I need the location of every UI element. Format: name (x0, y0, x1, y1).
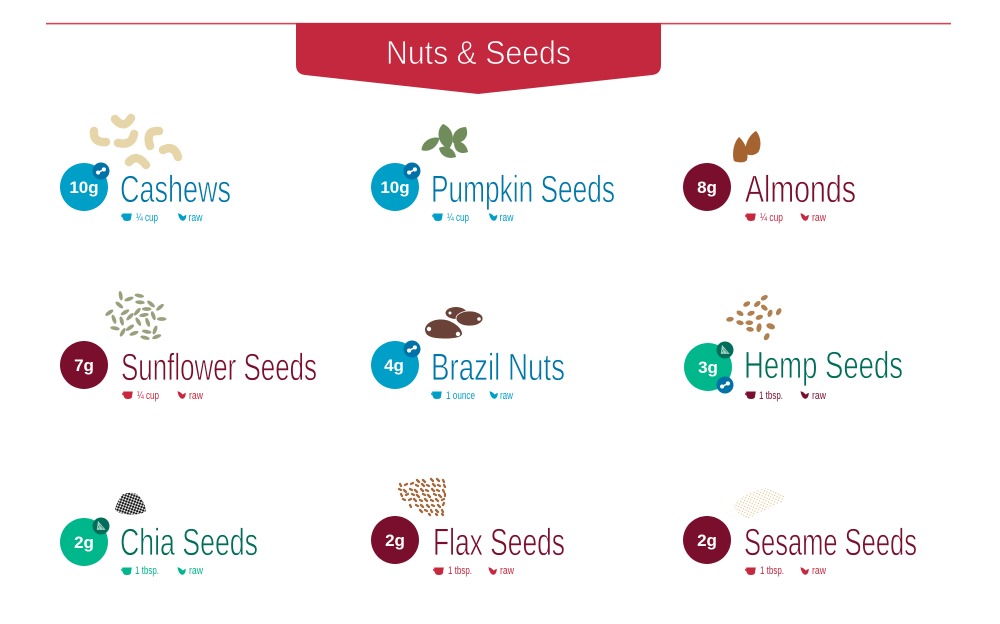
protein circle (371, 341, 419, 389)
icon: protein badge (404, 162, 420, 180)
panel: sesame seeds (683, 488, 917, 577)
name: Cashews (120, 169, 231, 211)
icon: almonds (733, 131, 760, 162)
serving: raw (812, 565, 826, 577)
serving (433, 565, 514, 577)
serving: 1 tbsp. (760, 565, 784, 577)
serving: raw (500, 390, 513, 402)
panel: brazil nuts (371, 307, 565, 402)
panel: cashews (60, 118, 231, 224)
panel: almonds (683, 131, 856, 224)
icon: hemp seeds (726, 294, 783, 341)
icon: fiber badge (92, 518, 110, 534)
serving: raw (812, 212, 826, 224)
amount: 7g (74, 356, 94, 375)
amount: 2g (697, 531, 717, 550)
serving: raw (189, 390, 203, 402)
serving: ¼ cup (137, 390, 159, 402)
protein circle (683, 516, 731, 564)
serving: 1 ounce (446, 390, 475, 402)
serving: 1 tbsp. (448, 565, 472, 577)
serving (431, 390, 513, 402)
serving (121, 565, 203, 577)
serving: 1 tbsp. (135, 565, 159, 577)
icon: sesame seeds (733, 488, 785, 519)
protein circle (683, 163, 731, 211)
name: Hemp Seeds (744, 345, 903, 387)
serving: raw (500, 565, 514, 577)
name: Pumpkin Seeds (431, 169, 615, 211)
serving: raw (500, 212, 514, 224)
protein circle (371, 516, 419, 564)
name: Brazil Nuts (431, 347, 565, 389)
amount: 10g (69, 178, 99, 197)
name: Chia Seeds (120, 522, 258, 564)
name: Sunflower Seeds (121, 347, 317, 389)
serving: raw (189, 565, 203, 577)
icon: flax seeds (399, 479, 445, 515)
amount: 3g (698, 358, 718, 377)
protein circle (60, 341, 108, 389)
serving: ¼ cup (447, 212, 469, 224)
panel: sunflower seeds (60, 291, 317, 402)
title: Nuts & Seeds (386, 34, 571, 71)
icon: pumpkin seeds (422, 124, 468, 158)
panel: hemp seeds (684, 294, 903, 402)
amount: 2g (74, 533, 94, 552)
title banner (296, 23, 661, 94)
protein circle (371, 163, 419, 211)
serving: raw (188, 212, 203, 224)
top rule (46, 23, 951, 24)
icon: cashews (94, 118, 178, 165)
amount: 4g (384, 356, 404, 375)
protein circle (60, 518, 108, 566)
serving (745, 565, 826, 577)
icon: protein badge (716, 376, 734, 394)
serving: raw (812, 390, 826, 402)
panel: chia seeds (60, 493, 258, 577)
serving (122, 390, 203, 402)
amount: 10g (380, 178, 410, 197)
serving (432, 212, 514, 224)
protein circle (60, 163, 108, 211)
serving (745, 390, 826, 402)
protein circle (684, 343, 732, 391)
icon: sunflower seeds (104, 291, 166, 341)
serving (745, 212, 826, 224)
name: Almonds (745, 169, 856, 211)
serving: 1 tbsp. (759, 390, 783, 402)
icon: fiber badge (716, 342, 734, 358)
icon: protein badge (92, 162, 110, 180)
banner shape (296, 23, 661, 94)
icon: protein badge (404, 340, 420, 358)
name: Flax Seeds (433, 522, 565, 564)
serving: ¼ cup (136, 212, 158, 224)
name: Sesame Seeds (744, 522, 917, 564)
serving (121, 212, 203, 224)
panel: flax seeds (371, 479, 565, 577)
amount: 8g (697, 178, 717, 197)
icon: brazil nuts (425, 307, 483, 339)
amount: 2g (385, 531, 405, 550)
panel: pumpkin seeds (371, 124, 615, 224)
icon: chia seeds (115, 493, 146, 515)
serving: ¼ cup (760, 212, 783, 224)
